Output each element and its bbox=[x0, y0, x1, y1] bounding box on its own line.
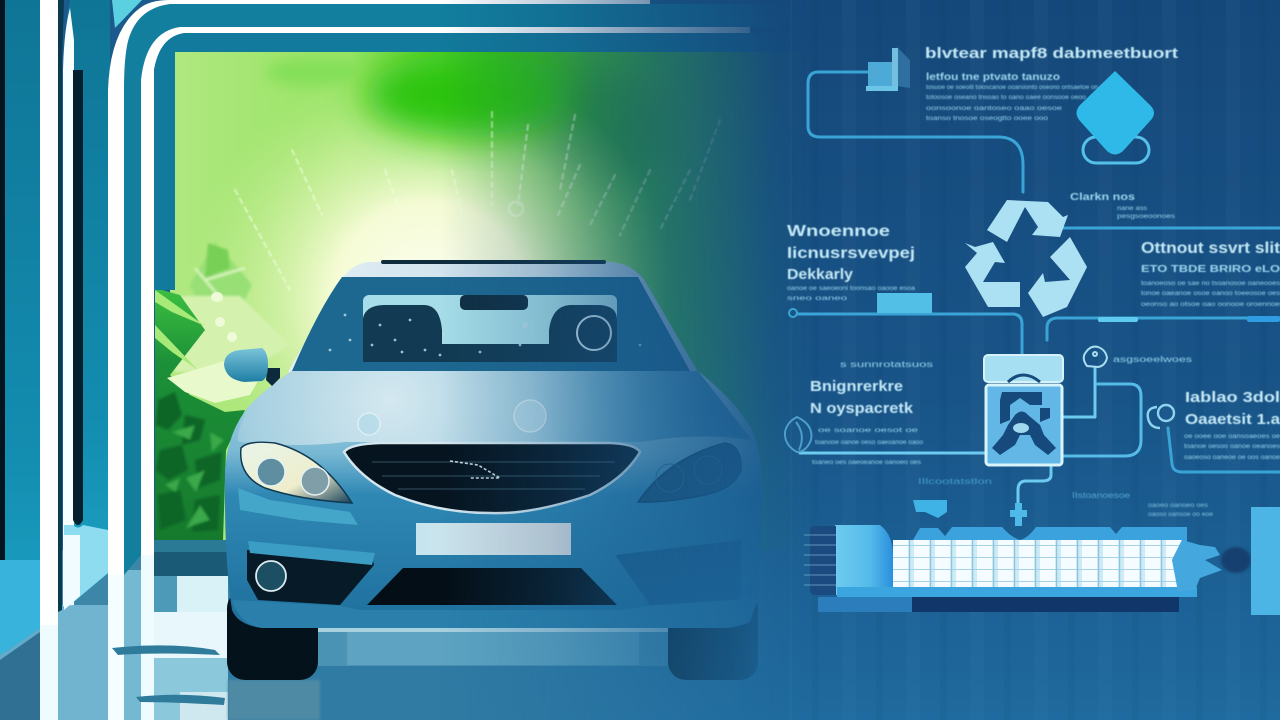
hood highlight bbox=[238, 371, 752, 445]
lower air intake bbox=[367, 568, 617, 605]
subheading: letfou tne ptvato tanuzo bbox=[926, 72, 1060, 83]
device top unit bbox=[984, 355, 1063, 382]
left text block: upper: Dekkarly bbox=[787, 266, 854, 283]
middle captions above battery: IIlcootatstlon bbox=[918, 477, 992, 486]
car body bbox=[225, 371, 762, 628]
green backdrop with light rays bbox=[170, 50, 810, 570]
right text block: lower bbox=[1184, 389, 1280, 461]
lower band bbox=[837, 587, 1197, 597]
right text block: upper: oeonso ao otsoe oao oonooe oroennoe bbox=[1141, 301, 1280, 308]
small caption beside recycle icon: nane ass bbox=[1117, 205, 1148, 212]
bright strip below headlight bbox=[238, 488, 358, 525]
left text block: lower: s sunnrotatsuos bbox=[840, 360, 933, 369]
battery pack bbox=[804, 525, 1251, 612]
left text block: upper: oanoe oe saeoeoni toonsao oaooe esoa bbox=[787, 285, 915, 292]
icon: small blue chip bbox=[913, 500, 947, 518]
icon: CO2 rings bbox=[1148, 405, 1174, 428]
left text block: upper: sneo oaneo bbox=[787, 295, 848, 302]
left text block: upper bbox=[787, 223, 915, 302]
right fog lamp bay bbox=[615, 540, 742, 605]
caption beside cloud: asgsoeelwoes bbox=[1113, 355, 1192, 364]
body text: toanso tnosoe oseogtto ooee ooo bbox=[926, 115, 1048, 122]
diagram connector lines bbox=[797, 72, 1280, 510]
small caption beside recycle icon: pesgsoeoonoes bbox=[1117, 213, 1176, 220]
left end cap bbox=[804, 525, 893, 595]
battery cells bbox=[893, 540, 1182, 588]
right headlight bbox=[638, 443, 741, 502]
rear wheels bbox=[227, 590, 758, 680]
right panel texture bbox=[790, 0, 1280, 720]
body text: oonsoonoe oantoseo oaao oesoe bbox=[926, 105, 1063, 112]
foliage mottling bbox=[156, 392, 222, 532]
body text bbox=[926, 84, 1098, 122]
middle captions above battery: IIstoanoesoe bbox=[1072, 491, 1131, 500]
heading: blvtear mapf8 dabmeetbuort bbox=[925, 45, 1178, 62]
water drops on hood bbox=[358, 400, 546, 435]
right text block: upper: tonoe oaeanoe osoe oanoo toeeosoe oes bbox=[1141, 290, 1280, 297]
side mirror bbox=[224, 348, 280, 386]
left text block: lower: N oyspacretk bbox=[810, 400, 914, 417]
left text block: upper: Iicnusrsvevpej bbox=[787, 245, 915, 262]
left text block: lower: toaneo oes oaeoeanoe oanoeo oes bbox=[812, 459, 922, 466]
right text block: upper bbox=[1141, 240, 1280, 308]
left headlight bbox=[241, 442, 352, 503]
left text block: lower bbox=[810, 360, 933, 466]
lower shadow bbox=[912, 597, 1179, 612]
right text block: lower: toanoe oesoo oanoe oeanoes bbox=[1184, 443, 1280, 450]
battery module device bbox=[984, 355, 1063, 465]
icon: plug cross bbox=[1010, 503, 1027, 526]
icon: leaf bbox=[785, 417, 811, 452]
body text: totoosoe oseano tnsoao to oano oaee oonsooe oeoo bbox=[926, 94, 1086, 101]
right text block: upper: toanoeoso oe sae no tsoanosoe oaneooes bbox=[1141, 280, 1280, 287]
right edge panel bbox=[1251, 507, 1280, 615]
right splash bbox=[1172, 540, 1222, 592]
left tunnel pillars bbox=[0, 0, 810, 655]
windshield bbox=[292, 260, 690, 371]
right text block: upper: ETO TBDE BRIRO eLO bbox=[1141, 264, 1280, 275]
icon: recycle arrows bbox=[965, 200, 1087, 317]
left fog lamp bay bbox=[247, 541, 375, 605]
middle captions above battery: oaoeo oanoeo oes bbox=[1148, 502, 1209, 509]
right text block: lower: oe ooee ooe oansoaeoes oe bbox=[1184, 433, 1280, 440]
icon: blue diamond on stand bbox=[1076, 71, 1154, 163]
small caption beside recycle icon: Clarkn nos bbox=[1070, 192, 1136, 203]
car bbox=[224, 260, 788, 720]
connector highlights bbox=[1098, 316, 1280, 322]
left text block: upper: Wnoennoe bbox=[787, 223, 890, 240]
floor with reflections bbox=[0, 540, 800, 720]
device body bbox=[986, 385, 1062, 465]
grille bbox=[344, 443, 640, 513]
right text block: lower: Oaaetsit 1.a bbox=[1185, 411, 1280, 428]
license plate bbox=[416, 523, 571, 555]
blue fade overlay bbox=[456, 0, 1280, 720]
right text block: upper: Ottnout ssvrt slit bbox=[1141, 240, 1280, 257]
top scalloped cover bbox=[913, 527, 1187, 545]
foliage bbox=[155, 242, 290, 540]
light blue tab bbox=[877, 293, 932, 313]
left text block: lower: Bnignrerkre bbox=[810, 378, 903, 395]
small caption beside recycle icon bbox=[1070, 192, 1176, 220]
icon: cloud node bbox=[1084, 347, 1107, 367]
left text block: lower: toanooe oanoe oeso oaeoanoe oaoo bbox=[815, 439, 923, 446]
right text block: lower: oaoeoso oaneoe oe oos oanoe bbox=[1184, 454, 1280, 461]
pale leaf clusters above foliage bbox=[175, 242, 290, 372]
bumper lower bbox=[232, 598, 758, 628]
left text block: lower: oe soanoe oesot oe bbox=[818, 427, 919, 434]
lower left base bbox=[818, 597, 912, 612]
right text block: lower: Iablao 3dol bbox=[1185, 389, 1280, 406]
car cabin roof bbox=[288, 262, 698, 372]
middle captions above battery bbox=[918, 477, 1213, 518]
icon: server box bbox=[866, 47, 910, 91]
middle captions above battery: oaoso oansoe oo eoe bbox=[1148, 511, 1213, 518]
dark blob bbox=[1221, 547, 1251, 573]
body text: tosuoe oe soeoiti toioscanoe ooarsionto oseono ontsaetoe on bbox=[926, 84, 1098, 91]
under car shadow and reflection bbox=[228, 628, 788, 720]
icon: small circle node bbox=[789, 309, 797, 317]
top heading block bbox=[925, 45, 1178, 122]
